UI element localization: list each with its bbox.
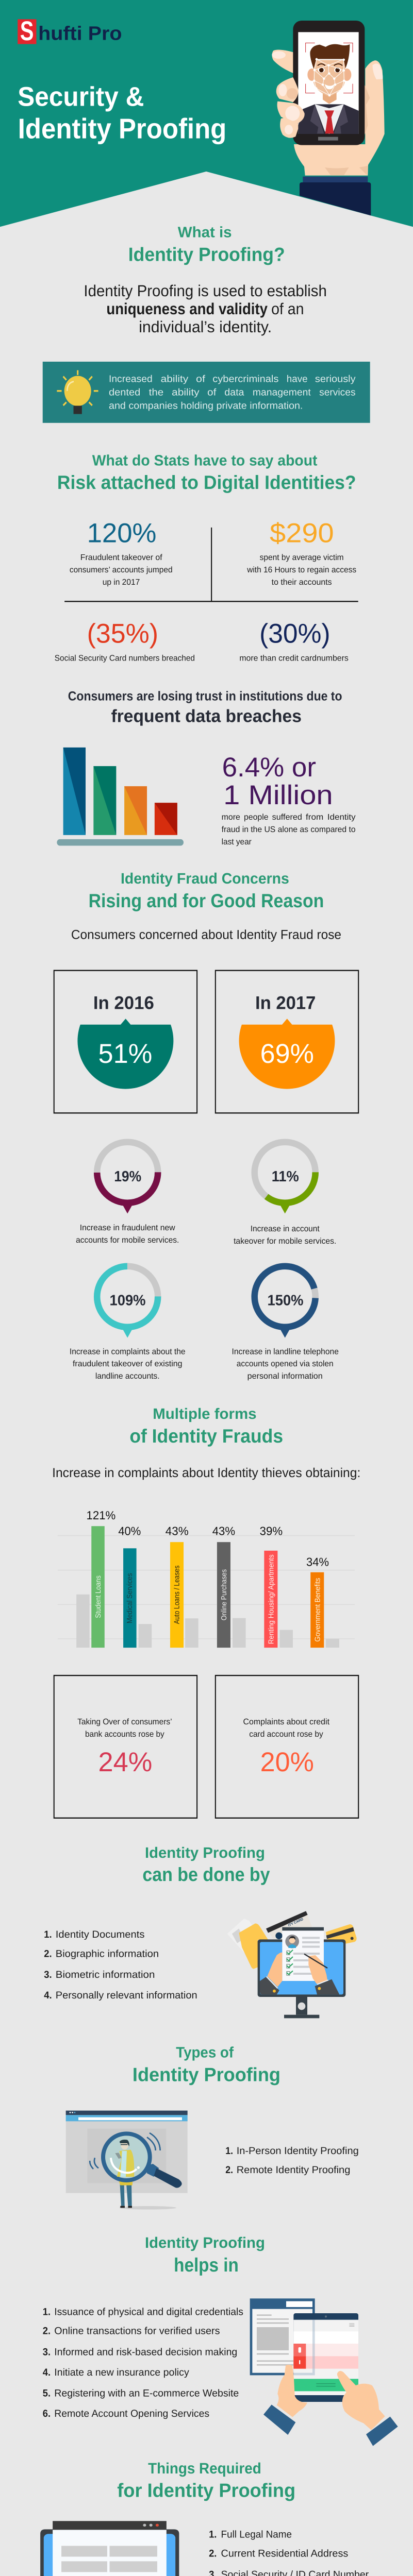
heading: helps in: Identity Proofing	[145, 2234, 265, 2251]
illustration: laptop with form	[30, 2521, 189, 2576]
stat: 6.4% or 1 million: 1 Million	[223, 780, 333, 810]
bar chart: complaints: Online Purchases	[220, 1569, 228, 1620]
heading: rising	[89, 870, 324, 911]
callout: cybercriminals: ability	[172, 386, 200, 397]
list: helps in: 4.	[43, 2367, 51, 2378]
heading: types of identity proofing: Identity Proofing	[133, 2064, 280, 2086]
list: helps in: Remote Account Opening Services	[54, 2408, 209, 2419]
bar chart: complaints: Auto Loans / Leases	[173, 1566, 180, 1624]
callout: cybercriminals: data	[224, 386, 244, 397]
caption: 109%: Increase in complaints about the	[70, 1347, 186, 1356]
list: methods: 1.	[44, 1929, 52, 1940]
panel: 2017: 69%	[260, 1039, 314, 1069]
stats section	[55, 452, 358, 846]
list: methods	[44, 1929, 197, 2001]
heading: risk attached: Risk attached to Digital Identities?	[57, 471, 356, 493]
stat: $290: with 16 Hours to regain access	[247, 565, 356, 574]
list: helps in: 2.	[43, 2325, 51, 2336]
bar chart: complaints: Medical Services	[125, 1573, 134, 1623]
list: types: 2.	[225, 2164, 233, 2176]
donut: 150%	[253, 1265, 317, 1338]
stat: 120%: consumers’ accounts jumped	[70, 565, 173, 574]
caption: 150%	[232, 1347, 339, 1380]
donut: 19%: 19%	[114, 1168, 141, 1185]
list: helps in: Online transactions for verified users	[54, 2325, 220, 2336]
stat: $290: spent by average victim	[260, 553, 344, 562]
caption: 109%: landline accounts.	[95, 1371, 160, 1380]
heading: helps in: helps in	[174, 2254, 239, 2276]
definition text: Identity Proofing is used to establish	[84, 282, 327, 300]
heading: rising: Rising and for Good Reason	[89, 890, 324, 911]
callout: cybercriminals: seriously	[315, 373, 356, 384]
heading: types of identity proofing	[133, 2044, 280, 2086]
heading: frequent data breaches: frequent data breaches	[111, 706, 302, 726]
stat: 35%: (35%)	[87, 619, 158, 649]
panel: credit card accounts: Complaints about credit	[243, 1717, 329, 1726]
caption: 109%: fraudulent takeover of existing	[73, 1359, 182, 1368]
illustration: browser with magnifier	[66, 2111, 188, 2210]
donut: 150%: 150%	[267, 1292, 304, 1309]
caption: 150%: Increase in landline telephone	[232, 1347, 339, 1356]
bar chart: complaints: Government Benefits	[313, 1578, 322, 1642]
stat: 30%	[239, 619, 349, 663]
donut: 109%: 109%	[109, 1292, 146, 1309]
list: methods: 3.	[44, 1969, 52, 1980]
stat: $290	[247, 518, 356, 587]
list: types: Remote Identity Proofing	[237, 2164, 350, 2176]
callout: cybercriminals: of	[196, 373, 205, 384]
callout: cybercriminals: management	[253, 386, 311, 397]
list: helps in: 3.	[43, 2346, 51, 2358]
stat: 120%: up in 2017	[103, 578, 140, 587]
logo: S	[20, 16, 34, 46]
logo: hufti Pro	[38, 22, 122, 44]
list: things required: 2.	[209, 2548, 217, 2559]
list: things required	[209, 2529, 369, 2576]
caption: 11%: Increase in account	[251, 1224, 320, 1233]
panel: bank accounts: 24%	[98, 1747, 152, 1777]
list: methods: Biographic information	[56, 1948, 159, 1959]
heading: what is identity proofing	[128, 224, 285, 265]
stat: 6.4% or 1 million: more	[222, 812, 240, 821]
caption: 11%: takeover for mobile services.	[234, 1236, 336, 1246]
stat: 6.4% or 1 million: people	[244, 812, 269, 821]
bar chart: complaints: 43%	[212, 1524, 235, 1538]
list: methods: Identity Documents	[56, 1929, 144, 1940]
stat: 6.4% or 1 million: from	[306, 812, 323, 821]
panel: credit card accounts: 20%	[260, 1747, 314, 1777]
bar chart: complaints: 39%	[260, 1524, 283, 1538]
donut: 11%: 11%	[272, 1168, 299, 1185]
donut captions row one	[76, 1223, 336, 1246]
list: helps in	[43, 2306, 243, 2419]
illustration: hands with tablet	[250, 2298, 398, 2446]
callout: cybercriminals: have	[287, 373, 308, 384]
list: helps in: Registering with an E-commerce Website	[54, 2387, 239, 2399]
concerns section	[54, 870, 358, 1113]
list: types	[225, 2145, 359, 2176]
multiple forms section	[52, 1347, 360, 1818]
header section	[0, 0, 413, 423]
stat: 120%	[70, 518, 173, 587]
callout: cybercriminals: cybercriminals	[212, 373, 278, 384]
callout: cybercriminals: dented	[109, 386, 140, 397]
list: helps in: 6.	[43, 2408, 51, 2419]
stat: 30%: (30%)	[259, 619, 331, 649]
stat: $290: $290	[270, 518, 334, 548]
stat: 6.4% or 1 million: fraud in the US alone as compared to	[222, 825, 356, 834]
panel: 2017: In 2017	[255, 993, 316, 1013]
list: things required: Full Legal Name	[221, 2529, 292, 2540]
panel: bank accounts: Taking Over of consumers’	[77, 1717, 172, 1726]
list: things required: Current Residential Address	[221, 2548, 348, 2559]
list: helps in: Informed and risk-based decision making	[54, 2346, 237, 2358]
panel: 2017	[216, 971, 358, 1113]
panel: 2016	[54, 971, 197, 1113]
illustration: monitor with checklist: ITY CARD	[288, 1917, 304, 1927]
donut: 109%	[97, 1266, 158, 1338]
list: helps in: 1.	[43, 2306, 51, 2317]
bar chart: complaints: 40%	[118, 1524, 141, 1538]
heading: can be done by	[142, 1844, 270, 1885]
heading: risk attached	[57, 452, 356, 493]
panel: credit card accounts: card account rose by	[249, 1730, 323, 1738]
panel: 2016: In 2016	[93, 993, 154, 1013]
caption: 150%: personal information	[247, 1371, 323, 1380]
list: methods: Personally relevant information	[56, 1990, 197, 2001]
stat: 30%: more than credit cardnumbers	[239, 653, 349, 663]
panel: bank accounts: bank accounts rose by	[85, 1730, 164, 1738]
heading: things required	[117, 2460, 295, 2501]
bar chart: complaints: 43%	[166, 1524, 189, 1538]
bar chart: complaints	[58, 1509, 355, 1648]
heading: multiple forms: of Identity Frauds	[129, 1425, 283, 1447]
icon: light bulb	[57, 370, 98, 414]
stat: 6.4% or 1 million: Identity	[327, 812, 356, 821]
panel: bank accounts	[54, 1675, 197, 1818]
heading: helps in	[145, 2234, 265, 2276]
caption: 11%	[234, 1224, 336, 1246]
list: methods: 4.	[44, 1990, 52, 2001]
bar chart: complaints: Renting Housing/ Apartments	[267, 1554, 275, 1644]
heading: risk attached: What do Stats have to say about	[92, 452, 318, 469]
callout: cybercriminals: the	[149, 386, 163, 397]
stat: 120%: Fraudulent takeover of	[80, 553, 162, 562]
definition text: uniqueness and validity	[106, 300, 268, 318]
donut: 19%	[97, 1142, 158, 1214]
callout: cybercriminals: services	[319, 386, 356, 397]
heading: can be done by: can be done by	[142, 1863, 270, 1885]
stat: 35%: Social Security Card numbers breached	[55, 653, 195, 663]
definition text	[84, 282, 327, 336]
caption: 19%	[76, 1223, 179, 1244]
definition text: of an	[271, 300, 304, 318]
heading: rising: Identity Fraud Concerns	[121, 870, 289, 887]
definition text: individual’s identity.	[139, 318, 272, 336]
title: Identity Proofing	[18, 113, 226, 145]
stat: 6.4% or 1 million: suffered	[272, 812, 302, 821]
list: methods: 2.	[44, 1948, 52, 1959]
heading: can be done by: Identity Proofing	[145, 1844, 265, 1861]
heading: things required: for Identity Proofing	[117, 2479, 295, 2501]
callout: cybercriminals: of	[207, 386, 217, 397]
illustration: hand holding phone with face scan	[272, 21, 385, 215]
title: Security &	[18, 81, 144, 112]
logo	[18, 16, 122, 46]
list: types: In-Person Identity Proofing	[237, 2145, 359, 2156]
heading: what is identity proofing: Identity Proofing?	[128, 243, 285, 265]
title	[18, 81, 226, 145]
donut: 11%	[255, 1142, 316, 1214]
stat: 6.4% or 1 million: last year	[222, 837, 252, 846]
list: helps in: Initiate a new insurance policy	[54, 2367, 189, 2378]
callout: cybercriminals: ability	[161, 373, 189, 384]
caption: 150%: accounts opened via stolen	[237, 1359, 334, 1368]
callout: cybercriminals: and companies holding private information.	[109, 400, 303, 411]
illustration: monitor with checklist	[227, 1911, 357, 2018]
caption: 109%	[70, 1347, 186, 1380]
helps in and requirements section	[30, 2234, 369, 2576]
heading: types of identity proofing: Types of	[176, 2044, 234, 2061]
caption: 19%: Increase in fraudulent new	[80, 1223, 175, 1232]
callout: cybercriminals	[43, 362, 370, 423]
stat: 6.4% or 1 million	[222, 752, 356, 846]
bar chart: complaints: 34%	[306, 1556, 329, 1569]
caption: 19%: accounts for mobile services.	[76, 1235, 179, 1244]
heading: what is identity proofing: What is	[178, 224, 232, 241]
heading: multiple forms: Multiple forms	[153, 1405, 257, 1422]
bar chart: complaints: Student Loans	[94, 1575, 102, 1618]
list: helps in: 5.	[43, 2387, 51, 2399]
stat: $290: to their accounts	[272, 578, 332, 587]
heading: frequent data breaches	[68, 689, 342, 726]
panel: 2016: 51%	[98, 1039, 152, 1069]
chart: falling bars	[57, 748, 184, 845]
list: methods: Biometric information	[56, 1969, 155, 1980]
callout: cybercriminals: Increased	[109, 373, 153, 384]
heading: things required: Things Required	[148, 2460, 261, 2477]
stat: 6.4% or 1 million: 6.4% or	[222, 752, 316, 783]
subheading: Consumers concerned about Identity Fraud rose	[71, 927, 341, 942]
stat: 35%	[55, 619, 195, 663]
heading: frequent data breaches: Consumers are losing trust in institutions due to	[68, 689, 342, 703]
list: helps in: Issuance of physical and digital credentials	[54, 2306, 243, 2317]
header background	[0, 0, 413, 227]
bar chart: complaints: 121%	[87, 1509, 115, 1522]
stat: 120%: 120%	[87, 518, 156, 548]
heading: multiple forms	[129, 1405, 283, 1447]
list: things required: 1.	[209, 2529, 217, 2540]
list: types: 1.	[225, 2145, 233, 2156]
panel: credit card accounts	[216, 1675, 358, 1818]
methods and types section	[44, 1844, 359, 2176]
subheading: Increase in complaints about Identity thieves obtaining:	[52, 1466, 360, 1480]
